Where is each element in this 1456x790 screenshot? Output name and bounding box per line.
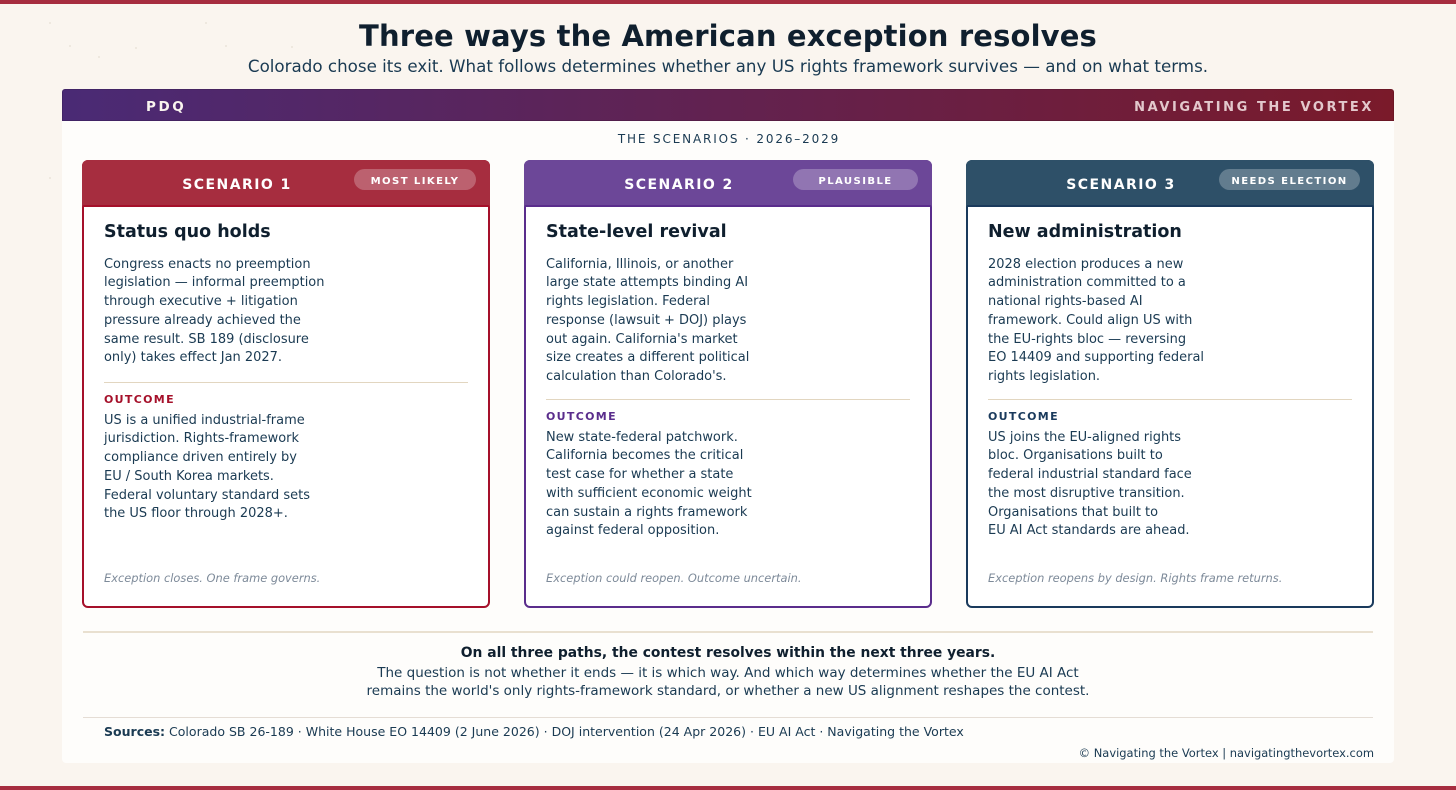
scenario 2 description: rights legislation. Federal xyxy=(546,294,710,309)
scenario 3 description: administration committed to a xyxy=(988,275,1186,290)
white content panel xyxy=(62,120,1394,763)
scenario 2 description: size creates a different political xyxy=(546,350,749,365)
panel: scenario 3 xyxy=(966,160,1374,608)
brand label: PDQ: PDQ xyxy=(146,99,186,115)
scenario 3 description: national rights-based AI xyxy=(988,294,1143,309)
scenario 3 description: framework. Could align US with xyxy=(988,313,1192,328)
scenario 2 description: response (lawsuit + DOJ) plays xyxy=(546,313,746,328)
scenario 3 outcome text: the most disruptive transition. xyxy=(988,486,1185,501)
scenario 3 description: EO 14409 and supporting federal xyxy=(988,350,1204,365)
scenario 2 outcome text: against federal opposition. xyxy=(546,523,719,538)
scenario 2 header xyxy=(524,160,932,207)
scenario 1 header: MOST LIKELY xyxy=(371,176,459,187)
scenario 1 outcome text: compliance driven entirely by xyxy=(104,450,297,465)
scenario 3 header: NEEDS ELECTION xyxy=(1231,176,1348,187)
scenario 2 heading: State-level revival xyxy=(546,222,727,242)
scenario 3 outcome text: federal industrial standard face xyxy=(988,467,1192,482)
scenario 1 description: same result. SB 189 (disclosure xyxy=(104,332,309,347)
scenario 2 outcome text: with sufficient economic weight xyxy=(546,486,752,501)
scenario 1 footnote: Exception closes. One frame governs. xyxy=(104,571,320,585)
scenario 2 description: out again. California's market xyxy=(546,332,738,347)
scenario 3 header xyxy=(966,160,1374,207)
scenario 1 outcome text: the US floor through 2028+. xyxy=(104,506,288,521)
scenario 2 description: California, Illinois, or another xyxy=(546,257,733,272)
scenario 3 outcome text: bloc. Organisations built to xyxy=(988,448,1163,463)
section label: THE SCENARIOS · 2026–2029 xyxy=(618,132,840,146)
panel: scenario 1 xyxy=(82,160,490,608)
scenario 1 outcome text: US is a unified industrial-frame xyxy=(104,413,305,428)
sources: Sources: Colorado SB 26-189 · White House EO 14409 (2 June 2026) · DOJ intervention (24 Apr 2026) · EU AI Act · Navigating the Vortex xyxy=(104,724,964,739)
conclusion text: remains the world's only rights-framework standard, or whether a new US alignment reshapes the contest. xyxy=(367,683,1089,699)
scenario 3 footnote: Exception reopens by design. Rights frame returns. xyxy=(988,571,1282,585)
scenario 2 description: calculation than Colorado's. xyxy=(546,369,727,384)
scenario 3 heading: New administration xyxy=(988,222,1182,242)
scenario 3 outcome text: Organisations that built to xyxy=(988,504,1158,520)
brand label: Navigating the Vortex: NAVIGATING THE VORTEX xyxy=(1134,100,1374,115)
scenario 2 description xyxy=(546,257,749,384)
scenario 1 outcome text: Federal voluntary standard sets xyxy=(104,488,310,503)
scenario 1 heading: Status quo holds xyxy=(104,222,271,242)
scenario 1 description: through executive + litigation xyxy=(104,294,298,309)
scenario 2 outcome text: California becomes the critical xyxy=(546,448,743,463)
scenario 1 outcome text: jurisdiction. Rights-framework xyxy=(104,431,299,446)
top accent bar xyxy=(0,0,1456,4)
scenario 2 description: large state attempts binding AI xyxy=(546,275,748,290)
scenario 3 description: 2028 election produces a new xyxy=(988,257,1183,272)
scenario 3 description xyxy=(988,257,1204,384)
scenario 2 footnote: Exception could reopen. Outcome uncertain. xyxy=(546,571,802,585)
scenario 2 outcome text xyxy=(546,430,752,538)
title: Three ways the American exception resolves xyxy=(359,19,1097,53)
conclusion text xyxy=(367,665,1089,699)
panel: scenario 2 xyxy=(524,160,932,608)
scenario 1 outcome text xyxy=(104,413,310,521)
scenario 1 header xyxy=(82,160,490,207)
scenario 2 header: SCENARIO 2 xyxy=(624,177,734,193)
scenario 3 description: rights legislation. xyxy=(988,369,1100,384)
scenario 3 outcome label: OUTCOME xyxy=(988,410,1059,423)
brand banner xyxy=(62,89,1394,121)
conclusion heading: On all three paths, the contest resolves within the next three years. xyxy=(461,645,995,661)
scenario 3 description: the EU-rights bloc — reversing xyxy=(988,332,1186,347)
copyright: © Navigating the Vortex | navigatingthevortex.com xyxy=(1079,746,1374,760)
scenario 3 outcome text xyxy=(988,430,1192,538)
scenario 1 description: only) takes effect Jan 2027. xyxy=(104,350,282,365)
scenario 1 description xyxy=(104,257,324,365)
scenario 3 outcome text: US joins the EU-aligned rights xyxy=(988,430,1181,444)
scenario 1 description: Congress enacts no preemption xyxy=(104,257,311,272)
scenario 1 description: legislation — informal preemption xyxy=(104,275,324,290)
scenario 1 outcome label: OUTCOME xyxy=(104,393,175,406)
scenario 2 header: PLAUSIBLE xyxy=(818,176,893,187)
scenario 1 header: SCENARIO 1 xyxy=(182,177,292,193)
subtitle: Colorado chose its exit. What follows determines whether any US rights framework survives — and on what terms. xyxy=(248,56,1208,76)
scenario 2 outcome label: OUTCOME xyxy=(546,410,617,423)
scenario 3 outcome text: EU AI Act standards are ahead. xyxy=(988,523,1190,538)
scenario 1 description: pressure already achieved the xyxy=(104,313,301,328)
scenario 2 outcome text: can sustain a rights framework xyxy=(546,504,747,520)
bottom accent bar xyxy=(0,786,1456,790)
scenario 2 outcome text: New state-federal patchwork. xyxy=(546,430,738,444)
scenario 1 outcome text: EU / South Korea markets. xyxy=(104,469,274,484)
scenario 3 header: SCENARIO 3 xyxy=(1066,177,1176,193)
scenario 2 outcome text: test case for whether a state xyxy=(546,467,733,482)
conclusion text: The question is not whether it ends — it is which way. And which way determines whether the EU AI Act xyxy=(377,665,1079,681)
